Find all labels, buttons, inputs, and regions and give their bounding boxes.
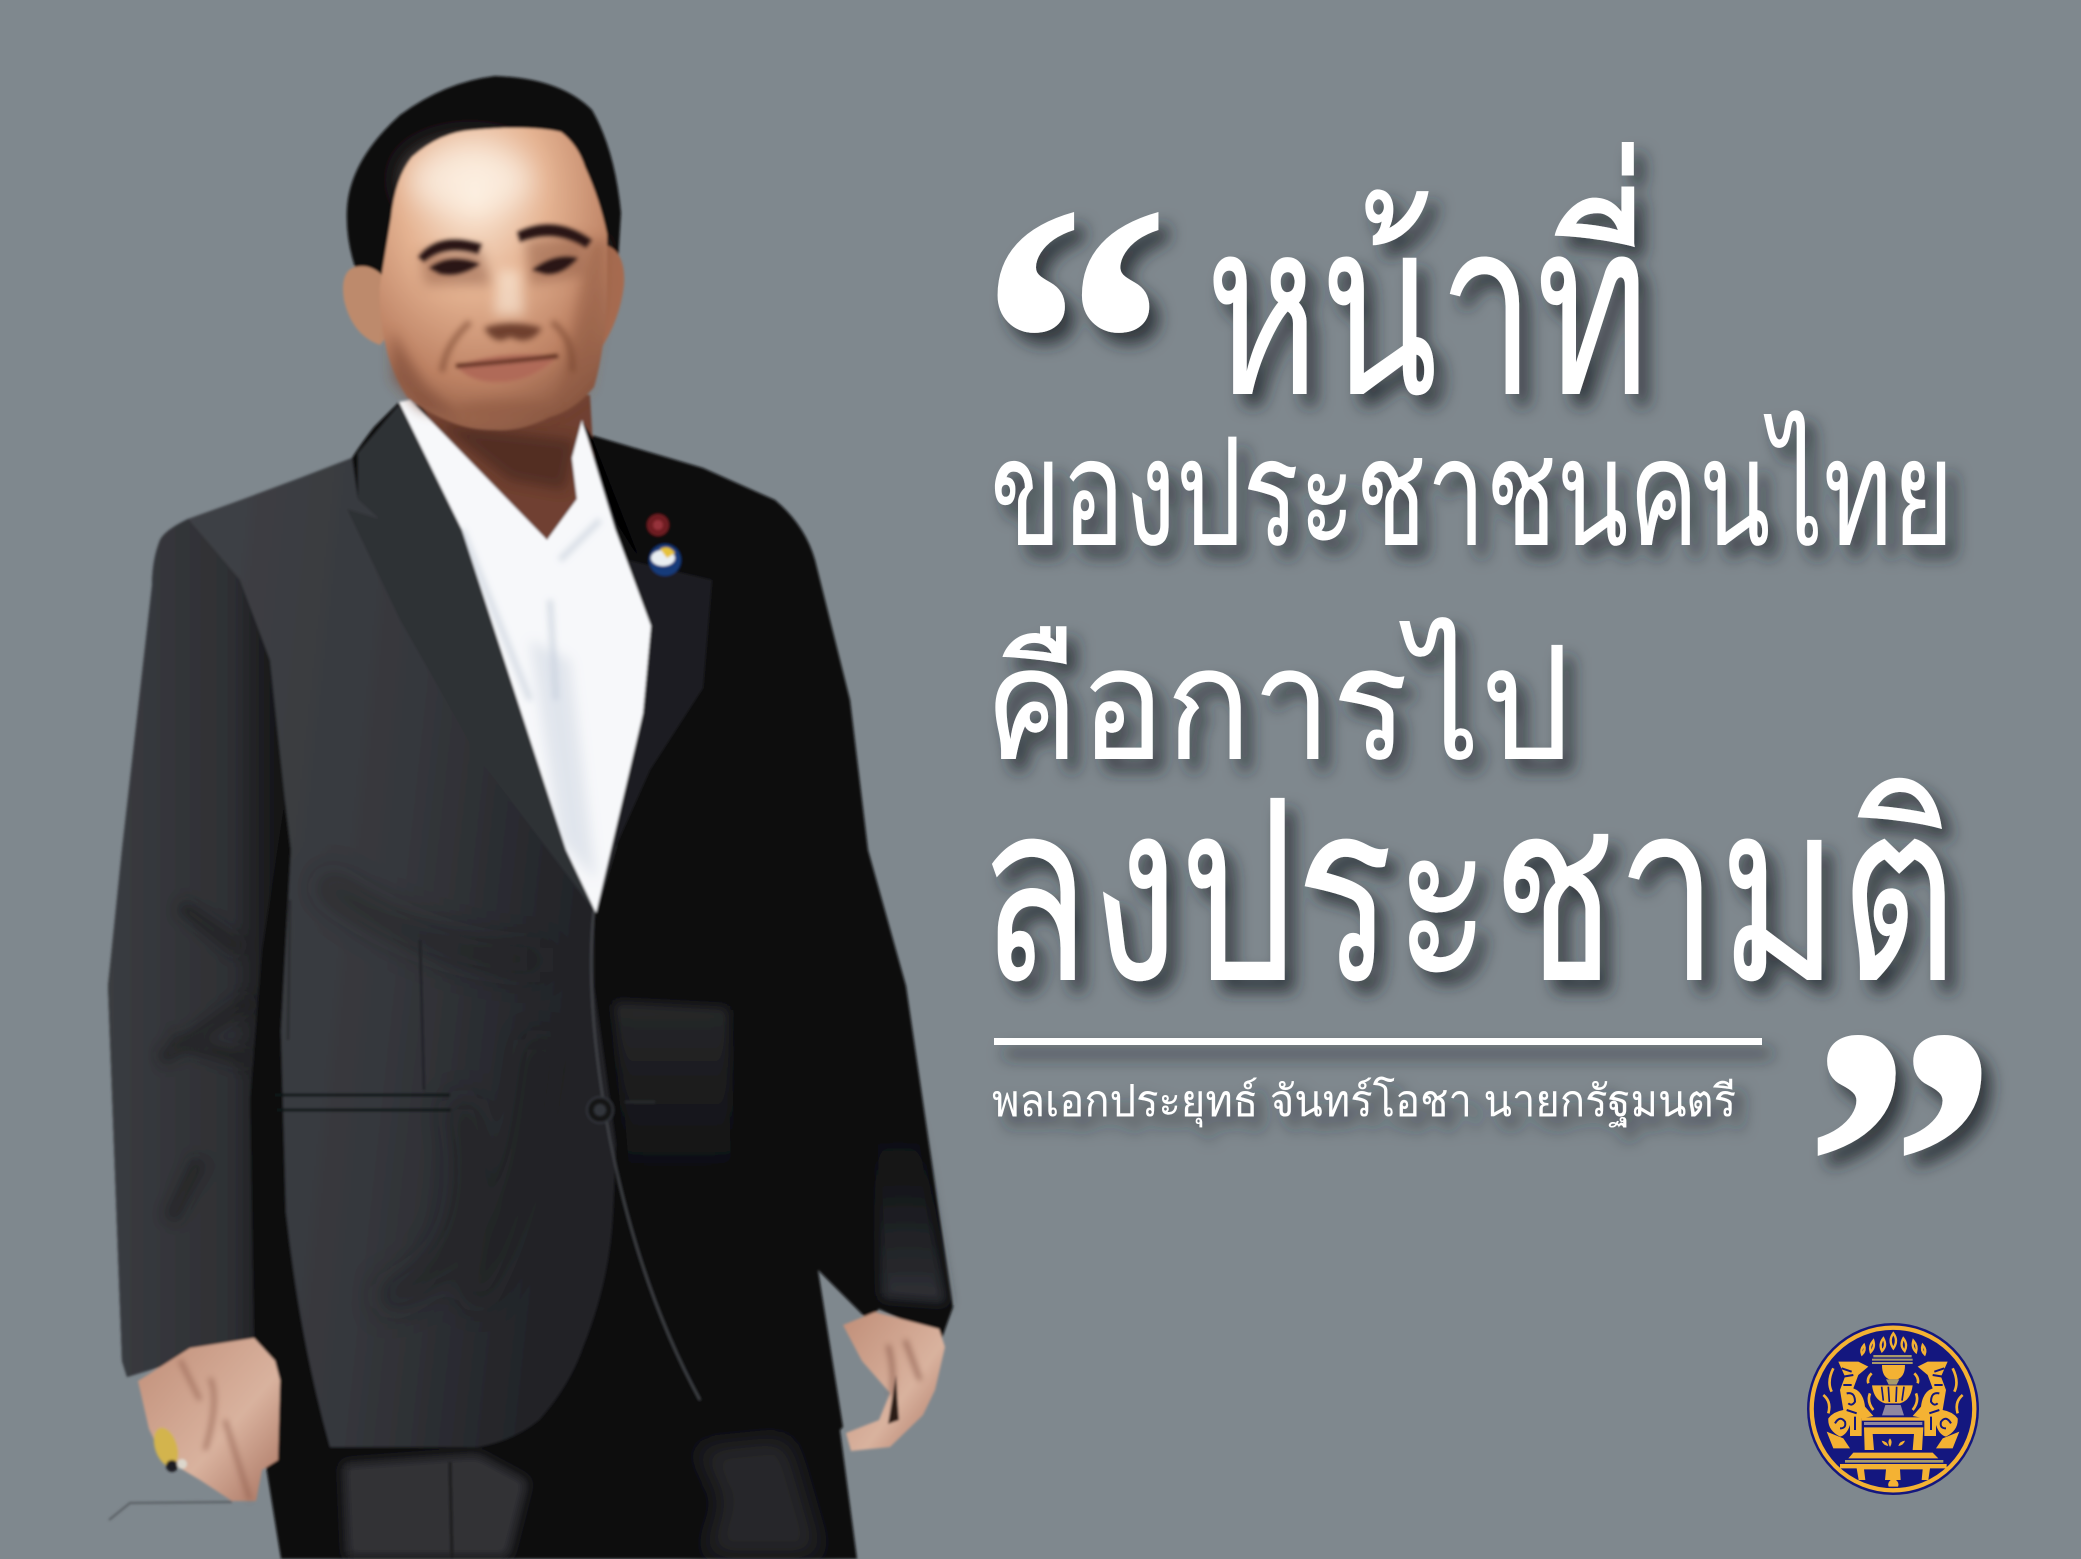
nose bridge (494, 270, 524, 315)
shirt (399, 400, 651, 913)
lapel pins (647, 514, 681, 576)
ring (149, 1425, 187, 1472)
opening quotation mark: “ (979, 122, 1171, 565)
head (343, 76, 624, 430)
artifact line near hand (109, 1502, 232, 1520)
forehead highlight (408, 146, 532, 214)
neck (415, 395, 596, 542)
left sleeve (108, 519, 285, 1377)
right eye (532, 256, 578, 274)
left eyebrow (418, 239, 482, 262)
jacket front panel (188, 458, 700, 1447)
right sleeve highlight (872, 1110, 948, 1305)
right lion (1913, 1362, 1963, 1448)
figure: man in dark suit (108, 76, 953, 1559)
nose (484, 323, 542, 340)
jacket and trouser silhouette (108, 402, 953, 1559)
left lapel (347, 405, 596, 913)
pocket (275, 1095, 451, 1110)
right ear (600, 245, 624, 350)
smile creases (442, 322, 572, 372)
right lapel (582, 422, 712, 913)
neck shadow (440, 425, 575, 490)
left lion (1823, 1362, 1873, 1448)
attribution: พลเอกประยุทธ์ จันทร์โอชา นายกรัฐมนตรี (992, 1076, 1736, 1128)
left ear (343, 266, 392, 345)
pedestal base (1840, 1453, 1947, 1487)
right eyebrow (517, 224, 592, 248)
right cheek shade (555, 240, 607, 415)
line 3: คือการไป (984, 617, 1571, 793)
face (380, 128, 607, 430)
eye socket shade (420, 235, 585, 285)
left hand (138, 1338, 280, 1501)
right jacket panel (612, 1000, 735, 1220)
mouth (456, 354, 558, 382)
quote block (978, 122, 1999, 1388)
line 1: หน้าที่ (1205, 142, 1650, 446)
button (587, 1097, 655, 1123)
flames (1861, 1333, 1925, 1354)
urn (1862, 1355, 1925, 1450)
left jaw shade (392, 330, 462, 418)
chin shade (455, 400, 555, 420)
right hand (843, 1312, 945, 1451)
rule (994, 1038, 1762, 1045)
seal: Office of the Prime Minister emblem (1807, 1323, 1979, 1495)
trousers (341, 1435, 826, 1559)
closing quotation mark: ” (1803, 945, 1999, 1388)
left eye (429, 259, 480, 275)
hair (347, 76, 621, 296)
